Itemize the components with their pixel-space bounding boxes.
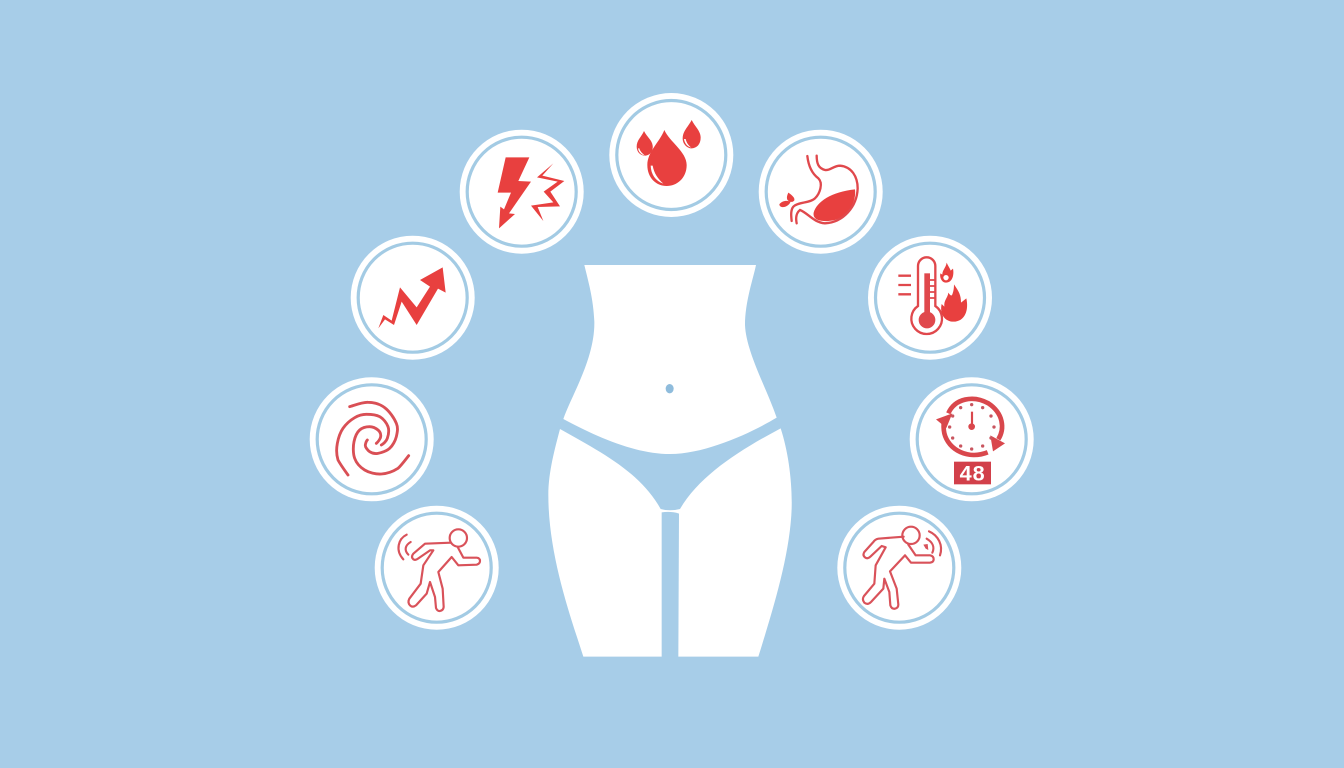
icon badge: 48 hour clock: 48 (960, 461, 986, 486)
body silhouette (548, 265, 792, 657)
icon badge: blood drops (609, 93, 733, 217)
navel (666, 384, 674, 393)
icon badge: rising zigzag arrow (351, 236, 475, 360)
icon badge: 48 hour clock (910, 377, 1034, 501)
icon badge: thermometer and flames (868, 236, 992, 360)
icon badge: spiral (310, 377, 434, 501)
icon badge: runner with pain waves at head (837, 506, 961, 630)
icon badge: stomach (759, 130, 883, 254)
hips and legs (548, 428, 792, 657)
icon badge: lightning bolts (460, 130, 584, 254)
icon badge: runner with pain waves at back (375, 506, 499, 630)
torso (563, 265, 777, 454)
